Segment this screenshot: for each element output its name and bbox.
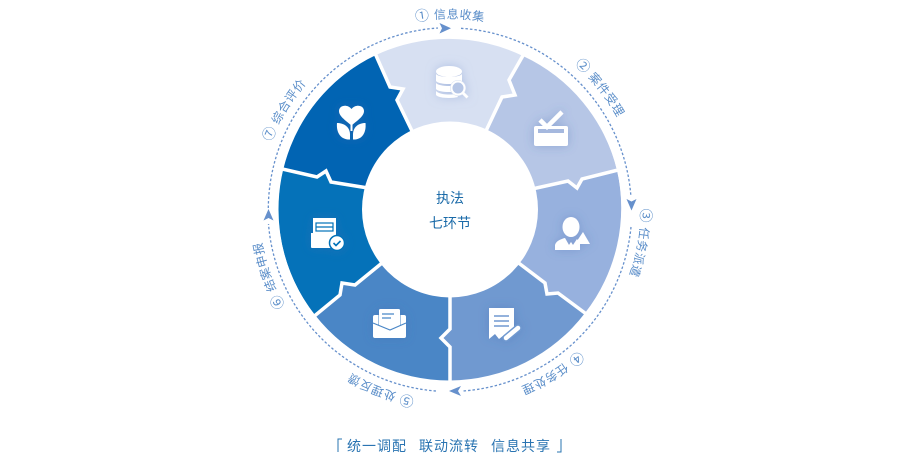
icon: document with pen <box>489 308 518 339</box>
segment 6: case closing <box>278 169 450 315</box>
opening bracket <box>338 439 342 452</box>
white dividers <box>278 51 622 384</box>
icon: database search <box>436 66 468 98</box>
icon: person with tie <box>555 217 590 250</box>
segment 7: overall evaluation <box>283 55 450 210</box>
centre title: 七环节 <box>429 215 471 231</box>
centre circle <box>362 122 538 298</box>
dashed cycle ring with arrows <box>264 23 636 396</box>
segment 4: task handling <box>441 210 585 380</box>
label 7: ⑦ 综合评价 <box>262 80 306 140</box>
label 1: ① 信息收集 <box>415 8 484 22</box>
segment 3: task dispatch <box>450 170 621 313</box>
centre title: 执法 <box>436 190 464 206</box>
segment 1: information collection <box>376 39 523 209</box>
segment 2: case acceptance <box>450 56 617 210</box>
bottom slogan: 信息共享 <box>491 438 551 454</box>
closing bracket <box>557 439 561 452</box>
centre title <box>429 190 471 231</box>
segment 5: feedback <box>315 210 450 381</box>
icon: form with check badge <box>311 218 344 250</box>
label 2: ② 案件受理 <box>576 58 625 118</box>
bottom slogan <box>338 438 561 454</box>
label 5: ⑤ 处理反馈 <box>348 372 414 408</box>
label 3: ③ 任务派遣 <box>629 209 653 277</box>
icon: open envelope <box>373 309 406 338</box>
label 4: ④ 任务处理 <box>521 352 584 396</box>
outer ring trim <box>276 36 624 383</box>
icon: check tray <box>534 112 568 146</box>
icon: heart flower <box>337 106 366 140</box>
bottom slogan: 联动流转 <box>419 438 479 454</box>
step labels <box>252 8 653 408</box>
bottom slogan: 统一调配 <box>347 438 407 454</box>
label 6: ⑥ 结案申报 <box>252 242 284 309</box>
